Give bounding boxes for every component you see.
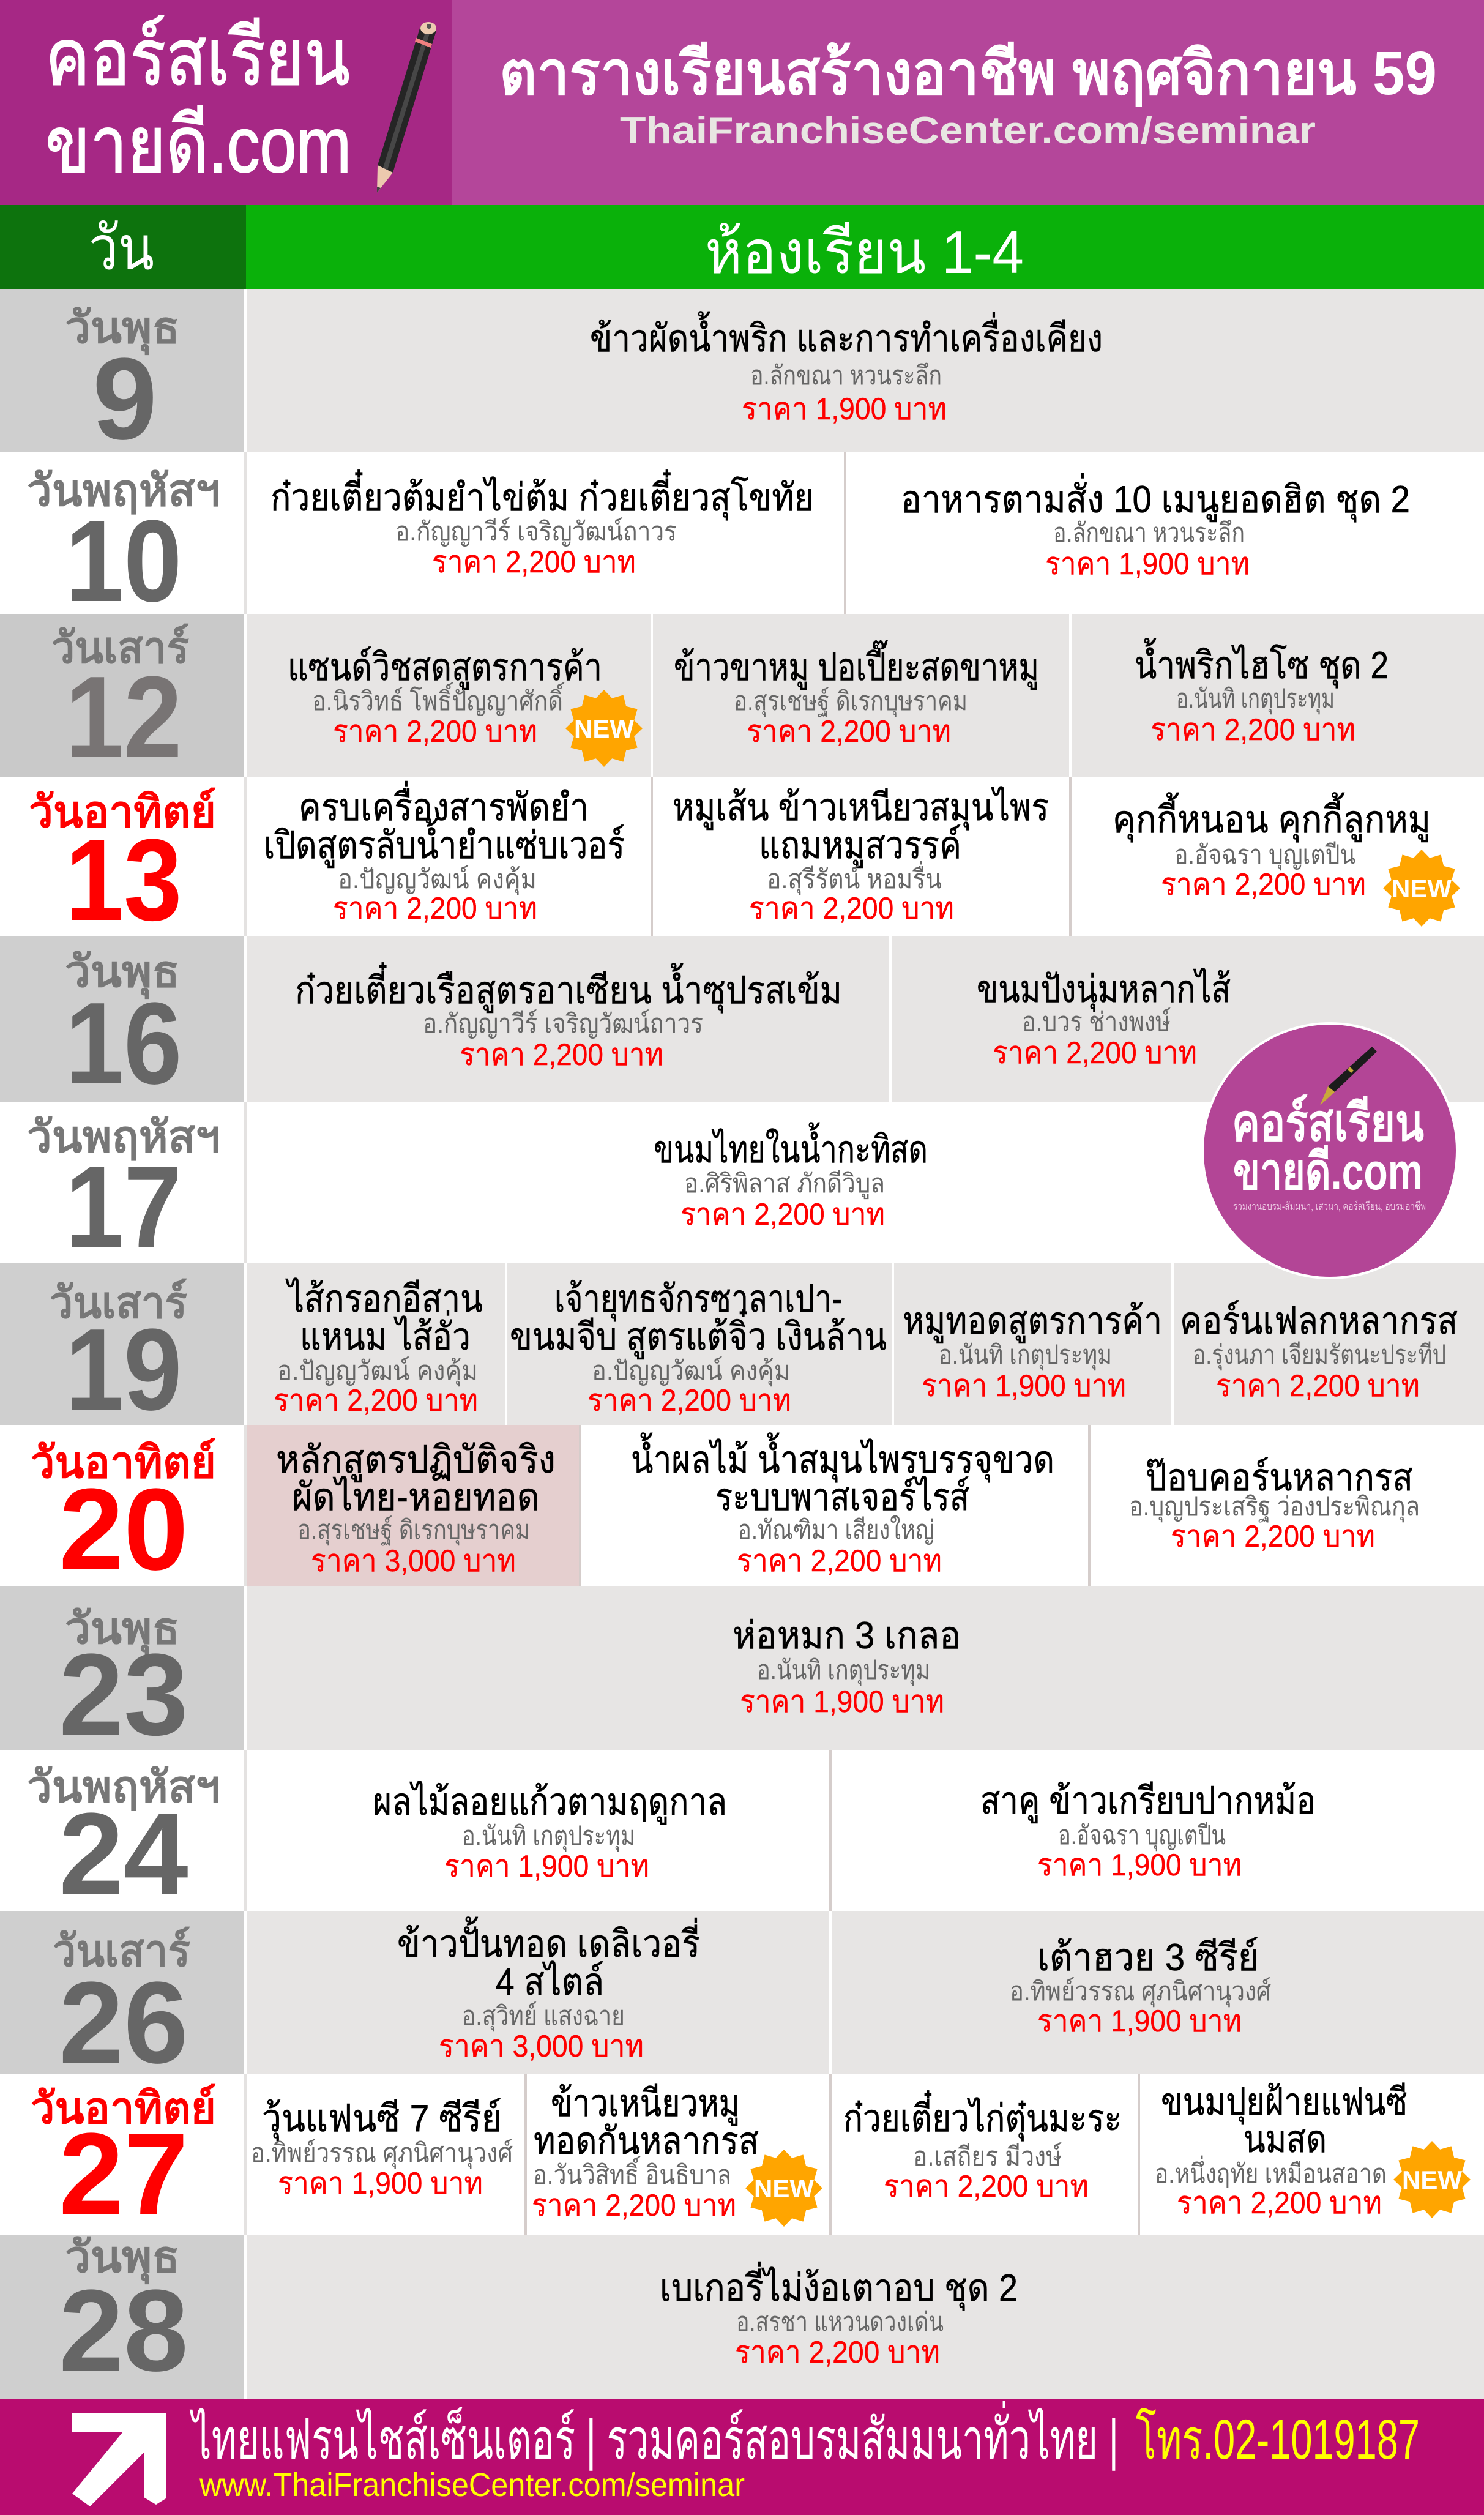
date: 20: วันอาทิตย์ [31, 1438, 216, 1487]
date: 13: วันอาทิตย์ [29, 787, 216, 837]
course: เปิดสูตรลับน้ำยำแซ่บเวอร์ [264, 818, 625, 868]
date: 16: วันพุธ [65, 947, 180, 1000]
course: 4 สไตล์ [496, 1960, 604, 2003]
icon: arrow [72, 2413, 166, 2506]
course: ก๋วยเตี๋ยวไก่ตุ๋นมะระ [843, 2090, 1122, 2141]
course [590, 311, 1103, 426]
course: ราคา 2,200 บาท [274, 1383, 478, 1418]
course: หมูทอดสูตรการค้า [903, 1300, 1162, 1343]
row: Saturday 12 [0, 614, 1484, 782]
course: ราคา 3,000 บาท [439, 2029, 644, 2063]
course: ราคา 1,900 บาท [1037, 1848, 1242, 1882]
header: logo panel [0, 0, 452, 205]
course: ราคา 2,200 บาท [333, 891, 537, 925]
date: 24: วันพฤหัสฯ [27, 1763, 220, 1812]
logo text: ขายดี.com [45, 102, 351, 189]
course: คุกกี้หนอน คุกกี้ลูกหมู [1113, 792, 1431, 842]
row: Sunday 20 [31, 1425, 1420, 1594]
course: อ.สรชา แหวนดวงเด่น [736, 2308, 944, 2337]
column header: classrooms [246, 205, 1484, 289]
course: ราคา 1,900 บาท [444, 1849, 649, 1883]
column header: classrooms: ห้องเรียน 1-4 [705, 219, 1024, 286]
course [295, 962, 842, 1072]
course [674, 640, 1039, 749]
date: 17: วันพฤหัสฯ [27, 1113, 220, 1162]
course: ห่อหมก 3 เกลอ [733, 1615, 961, 1657]
course [1180, 1300, 1458, 1403]
course [1113, 792, 1460, 927]
course [977, 968, 1231, 1070]
date: 17 [27, 1113, 220, 1272]
course: ก๋วยเตี๋ยวเรือสูตรอาเซียน น้ำซุปรสเข้ม [295, 962, 842, 1013]
course [510, 1278, 887, 1418]
course: ป๊อบคอร์นหลากรส [1146, 1457, 1413, 1499]
course: ข้าวผัดน้ำพริก และการทำเครื่องเคียง [590, 311, 1103, 360]
date: 27: วันอาทิตย์ [31, 2083, 216, 2133]
course: ราคา 2,200 บาท [884, 2169, 1089, 2203]
course: อ.อัจฉรา บุญเตปีน [1174, 840, 1355, 871]
date: 24: 24 [59, 1789, 188, 1919]
course: อ.ทิพย์วรรณ ศุภนิศานุวงศ์ [1010, 1977, 1271, 2008]
course: อ.สุรเชษฐ์ ดิเรกบุษราคม [734, 687, 968, 717]
course [251, 2098, 513, 2200]
course: เต้าฮวย 3 ซีรีย์ [1037, 1937, 1259, 1979]
course [288, 646, 643, 767]
course: ราคา 2,200 บาท [1216, 1369, 1420, 1403]
date: 28: 28 [59, 2266, 188, 2396]
row: Saturday 19 [0, 1263, 1484, 1435]
course: แซนด์วิชสดสูตรการค้า [288, 646, 602, 690]
course [274, 1277, 483, 1418]
course: ราคา 2,200 บาท [749, 891, 954, 925]
row: Wednesday 16 [0, 936, 1484, 1108]
course: highlighted: อ.สุรเชษฐ์ ดิเรกบุษราคม [297, 1515, 530, 1546]
course: อ.ปัญญวัฒน์ คงคุ้ม [592, 1356, 790, 1387]
date: 12: 12 [65, 652, 182, 782]
course: เจ้ายุทธจักรซาลาเปา- [554, 1278, 842, 1321]
course: วุ้นแฟนซี 7 ซีรีย์ [262, 2098, 502, 2141]
date: 10 [27, 466, 220, 626]
badge: new [565, 690, 643, 767]
course [532, 2082, 822, 2227]
course: อ.บุญประเสริฐ ว่องประพิณกุล [1129, 1492, 1420, 1523]
footer banner [0, 2399, 1484, 2515]
course: ราคา 1,900 บาท [278, 2166, 483, 2200]
course: อ.นันทิ เกตุประทุม [757, 1656, 930, 1686]
course: ขนมจีบ สูตรแต้จิ๋ว เงินล้าน [510, 1309, 887, 1359]
course: ราคา 1,900 บาท [1037, 2004, 1242, 2038]
row: Thursday 24 [27, 1750, 1316, 1919]
course: อ.ปัญญวัฒน์ คงคุ้ม [277, 1356, 478, 1387]
date: 19: วันเสาร์ [50, 1278, 187, 1328]
date: 16: 16 [65, 979, 182, 1108]
course: อ.นันทิ เกตุประทุม [462, 1822, 635, 1852]
course: ราคา 2,200 บาท [1171, 1519, 1375, 1553]
course: อ.อัจฉรา บุญเตปีน [1058, 1821, 1226, 1852]
course: น้ำพริกไฮโซ ชุด 2 [1135, 638, 1389, 688]
course: ราคา 2,200 บาท [737, 1544, 942, 1578]
course [1010, 1937, 1271, 2038]
date: 23: วันพุธ [65, 1604, 180, 1656]
course: ราคา 2,200 บาท [1150, 712, 1355, 747]
badge text: ขายดี.com [1233, 1143, 1423, 1200]
course: อ.นิรวิทธ์ โพธิ์ปัญญาศักดิ์ [312, 682, 565, 716]
course: น้ำผลไม้ น้ำสมุนไพรบรรจุขวด [631, 1432, 1054, 1482]
date: 13: 13 [65, 815, 182, 945]
row: Sunday 13 [29, 777, 1460, 945]
course: ครบเครื่องสารพัดยำ [299, 781, 589, 829]
date: 9 [65, 304, 180, 464]
icon: pencil [377, 22, 436, 193]
course: highlighted: หลักสูตรปฏิบัติจริง [276, 1439, 556, 1482]
date: 12: วันเสาร์ [51, 623, 189, 673]
row: Wednesday 28 [0, 2233, 1484, 2399]
row: Thursday 17 [27, 1102, 928, 1272]
course: อ.นันทิ เกตุประทุม [939, 1340, 1112, 1371]
column header: day: วัน [89, 214, 154, 283]
course: ทอดกันหลากรส [534, 2120, 759, 2162]
course: ราคา 2,200 บาท [460, 1037, 663, 1072]
course: อ.ลักขณา หวนระลึก [750, 361, 942, 391]
course [901, 473, 1410, 581]
badge text [1232, 1094, 1426, 1213]
badge: new: NEW [1402, 2166, 1462, 2194]
course: อ.ทิพย์วรรณ ศุภนิศานุวงศ์ [251, 2139, 513, 2169]
course: ระบบพาสเจอร์ไรส์ [715, 1476, 969, 1519]
course [1129, 1457, 1420, 1553]
course: ราคา 1,900 บาท [1045, 547, 1250, 581]
course: อ.วันวิสิทธิ์ อินธิบาล [533, 2156, 731, 2190]
course [660, 2262, 1018, 2369]
date: 23: 23 [59, 1630, 188, 1760]
course: สาคู ข้าวเกรียบปากหม้อ [980, 1780, 1316, 1823]
course: ราคา 2,200 บาท [1177, 2186, 1382, 2220]
course: ราคา 2,200 บาท [432, 545, 636, 579]
course: อ.ลักขณา หวนระลึก [1053, 518, 1245, 548]
header: title panel [452, 0, 1484, 205]
course: ราคา 1,900 บาท [742, 392, 947, 426]
course: อ.ทัณฑิมา เสียงใหญ่ [738, 1515, 934, 1545]
course [631, 1432, 1054, 1578]
badge: new: NEW [1392, 874, 1452, 903]
date: 10: วันพฤหัสฯ [27, 466, 220, 515]
circular logo badge [1201, 1022, 1458, 1279]
course: ข้าวปั้นทอด เดลิเวอรี่ [397, 1916, 700, 1965]
course: ราคา 2,200 บาท [735, 2335, 940, 2369]
badge text: รวมงานอบรม-สัมมนา, เสวนา, คอร์สเรียน, อบรมอาชีพ [1233, 1200, 1426, 1213]
course: นมสด [1244, 2118, 1327, 2161]
date: 17: 17 [65, 1142, 182, 1272]
date: 9: 9 [92, 334, 157, 464]
course: อาหารตามสั่ง 10 เมนูยอดฮิต ชุด 2 [901, 473, 1410, 522]
course: แหนม ไส้อั่ว [300, 1310, 471, 1358]
course [980, 1780, 1316, 1882]
date: 24 [27, 1763, 220, 1919]
date: 20 [31, 1438, 216, 1594]
icon: pen [1320, 1047, 1377, 1105]
badge: new [1383, 850, 1460, 927]
date: 27: 27 [59, 2109, 188, 2239]
course [903, 1300, 1162, 1403]
date: 28: วันพุธ [65, 2233, 180, 2285]
course [270, 469, 814, 579]
url: ThaiFranchiseCenter.com/seminar [620, 110, 1316, 152]
course [264, 781, 625, 925]
course: ราคา 2,200 บาท [587, 1383, 791, 1418]
course: ราคา 2,200 บาท [747, 714, 951, 749]
badge: new [745, 2150, 822, 2227]
course: แถมหมูสวรรค์ [759, 824, 961, 868]
course: ราคา 1,900 บาท [922, 1369, 1126, 1403]
course: ราคา 2,200 บาท [680, 1197, 885, 1231]
date: 19: 19 [65, 1305, 182, 1435]
course [673, 786, 1049, 925]
course: อ.สุวิทย์ แสงฉาย [462, 2001, 625, 2032]
course: ขนมไทยในน้ำกะทิสด [654, 1122, 928, 1171]
course: อ.ปัญญวัฒน์ คงคุ้ม [338, 865, 537, 895]
badge: new [1393, 2141, 1471, 2218]
row: Wednesday 9 [0, 289, 1484, 464]
course: เบเกอรี่ไม่ง้อเตาอบ ชุด 2 [660, 2262, 1018, 2311]
date: 26: วันเสาร์ [53, 1926, 190, 1976]
course: ข้าวเหนียวหมู [551, 2082, 740, 2126]
course: ราคา 2,200 บาท [333, 714, 537, 749]
date: 9: วันพุธ [65, 304, 180, 356]
main title: ตารางเรียนสร้างอาชีพ พฤศจิกายน 59 [499, 39, 1437, 108]
course: ราคา 2,200 บาท [1161, 867, 1366, 902]
row: Wednesday 23 [0, 1586, 1484, 1760]
course: highlighted [276, 1439, 556, 1578]
course: ราคา 1,900 บาท [740, 1684, 944, 1719]
footer url: www.ThaiFranchiseCenter.com/seminar [199, 2467, 745, 2503]
course: หมูเส้น ข้าวเหนียวสมุนไพร [673, 786, 1049, 830]
course: อ.กัญญาวีร์ เจริญวัฒน์ถาวร [423, 1009, 703, 1039]
badge: new: NEW [574, 714, 634, 743]
course: ราคา 2,200 บาท [993, 1036, 1197, 1070]
row: Saturday 26 [0, 1911, 1484, 2088]
course: highlighted: ผัดไทย-หอยทอด [292, 1476, 540, 1519]
course: อ.เสถียร มีวงษ์ [913, 2142, 1062, 2172]
course [397, 1916, 700, 2063]
course: ขนมปุยฝ้ายแฟนซี [1161, 2081, 1408, 2124]
course [654, 1122, 928, 1231]
date: 10: 10 [65, 496, 182, 626]
course [373, 1781, 727, 1883]
date: 27 [31, 2083, 216, 2239]
logo text: คอร์สเรียน [45, 14, 350, 102]
course [1135, 638, 1389, 747]
course: อ.สุรีรัตน์ หอมรื่น [767, 861, 942, 895]
course [733, 1615, 961, 1719]
course: อ.กัญญาวีร์ เจริญวัฒน์ถาวร [395, 517, 677, 547]
date: 20: 20 [59, 1465, 188, 1594]
badge: new: NEW [754, 2174, 814, 2203]
row: Thursday 10 [0, 452, 1410, 626]
course: highlighted: ราคา 3,000 บาท [311, 1544, 516, 1578]
badge text: คอร์สเรียน [1232, 1094, 1424, 1151]
date: 13 [29, 787, 216, 945]
course: อ.นันทิ เกตุประทุม [1176, 684, 1335, 715]
course: ราคา 2,200 บาท [532, 2188, 736, 2222]
course: อ.บวร ช่างพงษ์ [1022, 1007, 1171, 1037]
course: อ.ศิริพิลาส ภักดีวิบูล [684, 1169, 885, 1200]
course: ไส้กรอกอีสาน [285, 1277, 483, 1320]
course: ขนมปังนุ่มหลากไส้ [977, 968, 1231, 1012]
course: ข้าวขาหมู ปอเปี๊ยะสดขาหมู [674, 640, 1039, 690]
course: ผลไม้ลอยแก้วตามฤดูกาล [373, 1781, 727, 1825]
logo text [45, 14, 351, 189]
date: 26: 26 [59, 1958, 188, 2088]
course [1155, 2081, 1471, 2220]
course: อ.หนึ่งฤทัย เหมือนสอาด [1155, 2156, 1387, 2189]
row: Sunday 27 [31, 2074, 1471, 2239]
course [843, 2090, 1122, 2203]
course: ก๋วยเตี๋ยวต้มยำไข่ต้ม ก๋วยเตี๋ยวสุโขทัย [270, 469, 814, 520]
column header: day [0, 205, 246, 289]
